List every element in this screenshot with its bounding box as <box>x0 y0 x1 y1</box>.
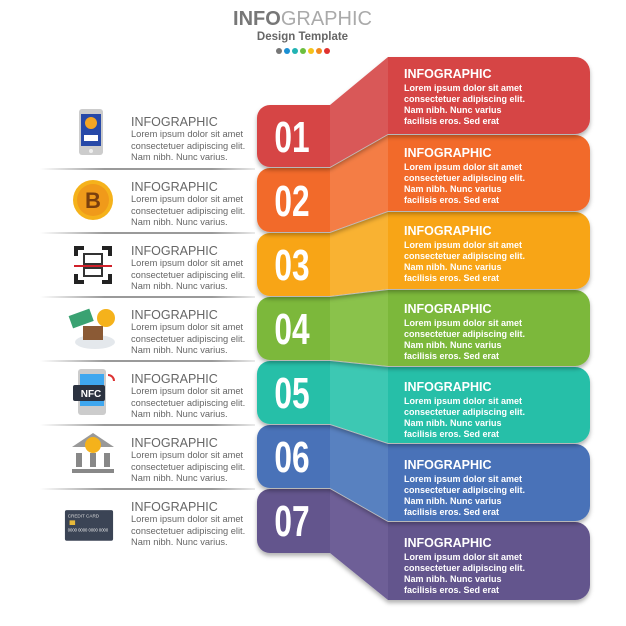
step 04: Lorem ipsum dolor sit amet <box>404 318 522 328</box>
step 05: Lorem ipsum dolor sit amet <box>404 396 522 406</box>
step 07: facilisis eros. Sed erat <box>404 585 499 595</box>
icon: cash briefcase <box>68 308 115 349</box>
left text 3: Lorem ipsum dolor sit amet consectetuer adipiscing elit. Nam nibh. Nunc varius. <box>131 258 245 291</box>
step 03: Nam nibh. Nunc varius <box>404 262 502 272</box>
icon: nfc phone <box>73 369 115 415</box>
step 01: consectetuer adipiscing elit. <box>404 94 525 104</box>
step 07: consectetuer adipiscing elit. <box>404 563 525 573</box>
step 04: consectetuer adipiscing elit. <box>404 329 525 339</box>
step 06 <box>257 425 590 521</box>
step 05: 05 <box>274 369 310 418</box>
step 04: Nam nibh. Nunc varius <box>404 340 502 350</box>
left text 5: INFOGRAPHIC <box>131 372 218 386</box>
step 07: 07 <box>274 497 310 546</box>
step 03: consectetuer adipiscing elit. <box>404 251 525 261</box>
icon: qr scan <box>74 246 112 284</box>
step 03: 03 <box>274 241 310 290</box>
icon: credit card <box>64 510 114 541</box>
step 04 <box>257 290 590 366</box>
step 05: consectetuer adipiscing elit. <box>404 407 525 417</box>
left text 3: INFOGRAPHIC <box>131 244 218 258</box>
left text 1: Lorem ipsum dolor sit amet consectetuer adipiscing elit. Nam nibh. Nunc varius. <box>131 129 245 162</box>
step 02: 02 <box>274 177 310 226</box>
step 06: INFOGRAPHIC <box>404 458 492 472</box>
step 03: INFOGRAPHIC <box>404 224 492 238</box>
left text 4: INFOGRAPHIC <box>131 308 218 322</box>
step 01: Lorem ipsum dolor sit amet <box>404 83 522 93</box>
step 02: Lorem ipsum dolor sit amet <box>404 162 522 172</box>
icon: bank <box>72 433 114 473</box>
icon: credit card: 0000 0000 0000 0000 <box>68 527 109 532</box>
icon: nfc phone: NFC <box>81 389 101 400</box>
icon: phone payment <box>79 109 103 155</box>
step 01 <box>257 57 590 167</box>
left text 1: INFOGRAPHIC <box>131 115 218 129</box>
title: INFOGRAPHIC <box>233 8 372 30</box>
step 02: INFOGRAPHIC <box>404 146 492 160</box>
icon: bitcoin: B <box>85 188 101 213</box>
step 06: 06 <box>274 433 310 482</box>
icon: bitcoin <box>73 180 113 220</box>
left text 2: Lorem ipsum dolor sit amet consectetuer adipiscing elit. Nam nibh. Nunc varius. <box>131 194 245 227</box>
step 02 <box>257 135 590 232</box>
left text 7: Lorem ipsum dolor sit amet consectetuer adipiscing elit. Nam nibh. Nunc varius. <box>131 514 245 547</box>
step 05: INFOGRAPHIC <box>404 380 492 394</box>
step 04: 04 <box>274 305 310 354</box>
step 01: INFOGRAPHIC <box>404 67 492 81</box>
left text 6: Lorem ipsum dolor sit amet consectetuer adipiscing elit. Nam nibh. Nunc varius. <box>131 450 245 483</box>
step 03 <box>257 212 590 296</box>
step 06: Lorem ipsum dolor sit amet <box>404 474 522 484</box>
step 06: facilisis eros. Sed erat <box>404 507 499 517</box>
title <box>233 8 372 54</box>
step 07 <box>257 489 590 600</box>
step 05 <box>257 361 590 443</box>
step 07: INFOGRAPHIC <box>404 536 492 550</box>
step 04: INFOGRAPHIC <box>404 302 492 316</box>
left text 4: Lorem ipsum dolor sit amet consectetuer adipiscing elit. Nam nibh. Nunc varius. <box>131 322 245 355</box>
left text 7: INFOGRAPHIC <box>131 500 218 514</box>
step 02: consectetuer adipiscing elit. <box>404 173 525 183</box>
step 07: Lorem ipsum dolor sit amet <box>404 552 522 562</box>
step 06: Nam nibh. Nunc varius <box>404 496 502 506</box>
left text 5: Lorem ipsum dolor sit amet consectetuer adipiscing elit. Nam nibh. Nunc varius. <box>131 386 245 419</box>
step 05: Nam nibh. Nunc varius <box>404 418 502 428</box>
left text 2: INFOGRAPHIC <box>131 180 218 194</box>
step 02: Nam nibh. Nunc varius <box>404 184 502 194</box>
step 02: facilisis eros. Sed erat <box>404 195 499 205</box>
step 06: consectetuer adipiscing elit. <box>404 485 525 495</box>
step 01: Nam nibh. Nunc varius <box>404 105 502 115</box>
step 03: Lorem ipsum dolor sit amet <box>404 240 522 250</box>
title: Design Template <box>257 31 348 43</box>
step 05: facilisis eros. Sed erat <box>404 429 499 439</box>
step 01: facilisis eros. Sed erat <box>404 116 499 126</box>
step 03: facilisis eros. Sed erat <box>404 273 499 283</box>
icon: credit card: CREDIT CARD <box>68 514 100 519</box>
step 07: Nam nibh. Nunc varius <box>404 574 502 584</box>
left text 6: INFOGRAPHIC <box>131 436 218 450</box>
step 01: 01 <box>274 113 310 162</box>
step 04: facilisis eros. Sed erat <box>404 351 499 361</box>
